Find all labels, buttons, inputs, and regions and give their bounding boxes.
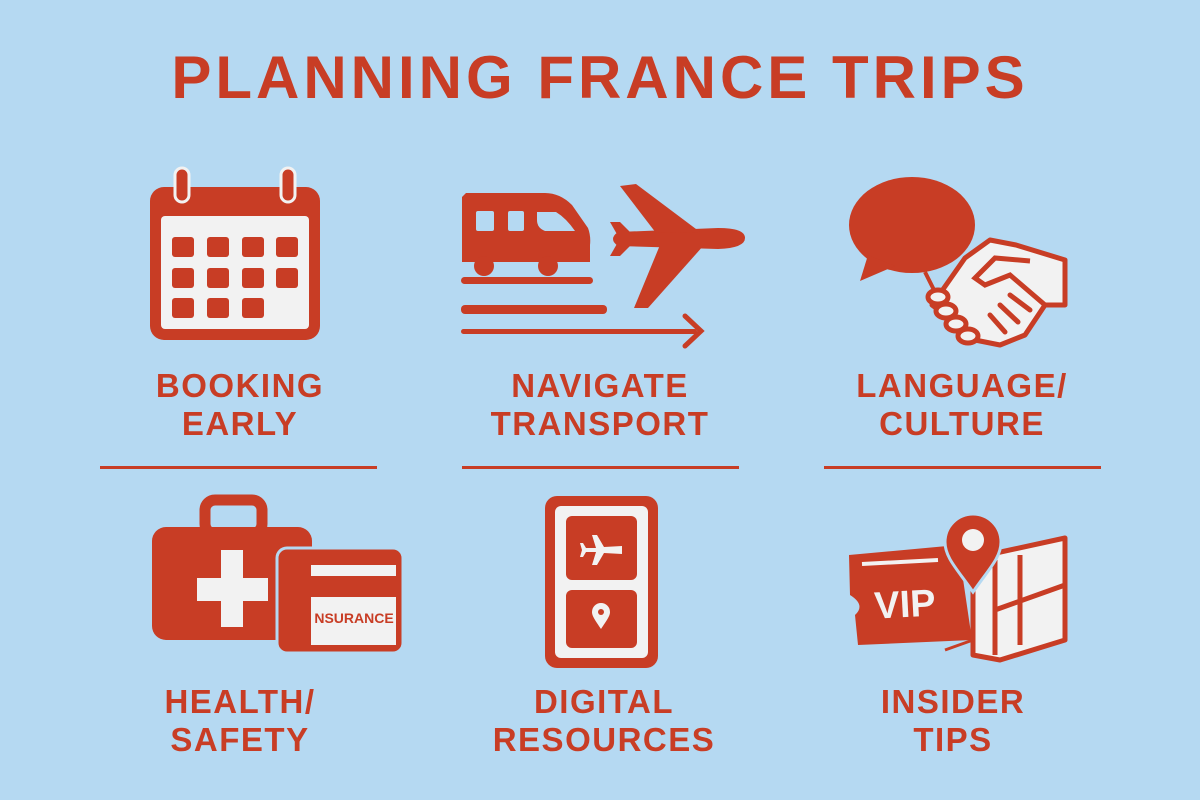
label: digital resources: RESOURCES	[493, 721, 715, 758]
label: insider tips: INSIDER	[881, 683, 1025, 720]
icon: first aid kit and insurance card	[152, 500, 403, 653]
icon: speech bubble and handshake	[849, 177, 1065, 345]
label: navigate transport	[491, 367, 709, 442]
label: booking early: EARLY	[182, 405, 298, 442]
label: insider tips: TIPS	[913, 721, 993, 758]
label: digital resources	[493, 683, 715, 758]
label: language culture	[856, 367, 1068, 442]
title: PLANNING FRANCE TRIPS	[171, 44, 1029, 111]
label: language culture: LANGUAGE/	[856, 367, 1068, 404]
label: navigate transport: TRANSPORT	[491, 405, 709, 442]
label: health safety	[164, 683, 316, 758]
icon: smartphone	[545, 496, 658, 668]
label: health safety: SAFETY	[170, 721, 310, 758]
label: navigate transport: NAVIGATE	[511, 367, 689, 404]
icon: train and plane	[461, 184, 745, 346]
icon: calendar	[150, 168, 320, 340]
icon: first aid kit and insurance card: NSURANCE	[314, 610, 394, 626]
label: language culture: CULTURE	[879, 405, 1045, 442]
label: digital resources: DIGITAL	[534, 683, 674, 720]
label: booking early: BOOKING	[156, 367, 324, 404]
icon: VIP ticket, pin, map	[849, 514, 1065, 660]
label: insider tips	[881, 683, 1025, 758]
label: health safety: HEALTH/	[164, 683, 316, 720]
label: booking early	[156, 367, 324, 442]
icon: VIP ticket, pin, map: VIP	[873, 582, 937, 628]
